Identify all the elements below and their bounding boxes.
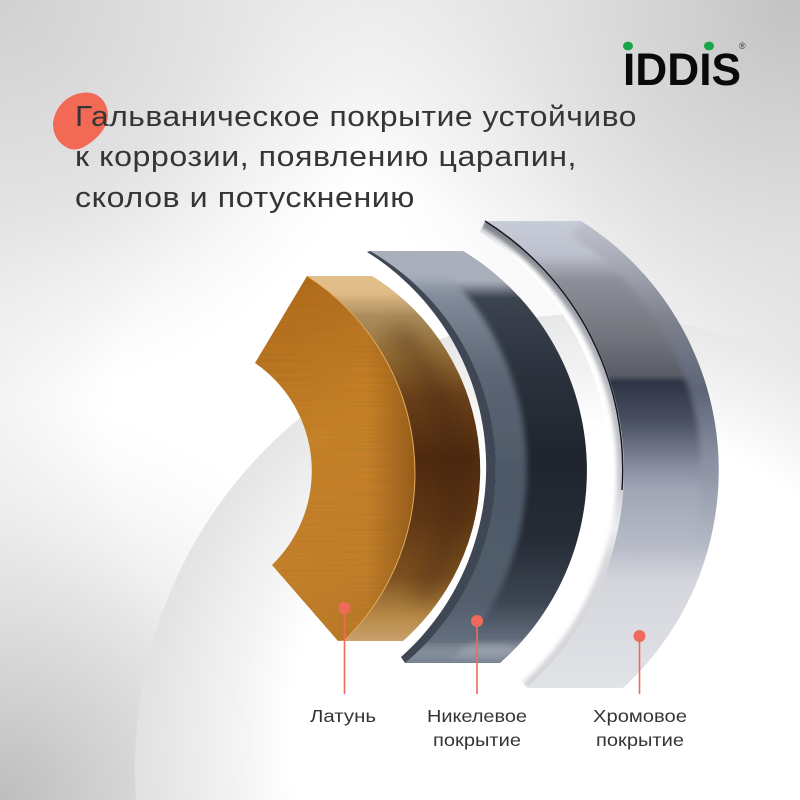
heading line 3: сколов и потускнению bbox=[75, 182, 415, 214]
callout: nickel marker bbox=[471, 615, 483, 694]
label: chrome: Хромовое bbox=[593, 706, 687, 726]
label: nickel bbox=[427, 706, 527, 750]
background circle bbox=[135, 314, 800, 800]
logo: IDDIS: IDDIS bbox=[623, 44, 741, 95]
accent blob bbox=[53, 92, 108, 149]
label: chrome: покрытие bbox=[596, 730, 684, 750]
label: chrome bbox=[593, 706, 687, 750]
callout: chrome marker bbox=[634, 630, 646, 694]
label: brass: Латунь bbox=[310, 706, 376, 726]
layer: nickel bbox=[367, 250, 587, 663]
logo: IDDIS: ® bbox=[739, 41, 746, 51]
callout: brass marker bbox=[338, 602, 350, 694]
label: nickel: покрытие bbox=[433, 730, 521, 750]
label: nickel: Никелевое bbox=[427, 706, 527, 726]
heading line 2: к коррозии, появлению царапин, bbox=[75, 141, 577, 173]
heading: Гальваническое покрытие устойчиво bbox=[75, 101, 637, 133]
layer: brass bbox=[250, 270, 480, 645]
layer: chrome bbox=[480, 221, 719, 688]
